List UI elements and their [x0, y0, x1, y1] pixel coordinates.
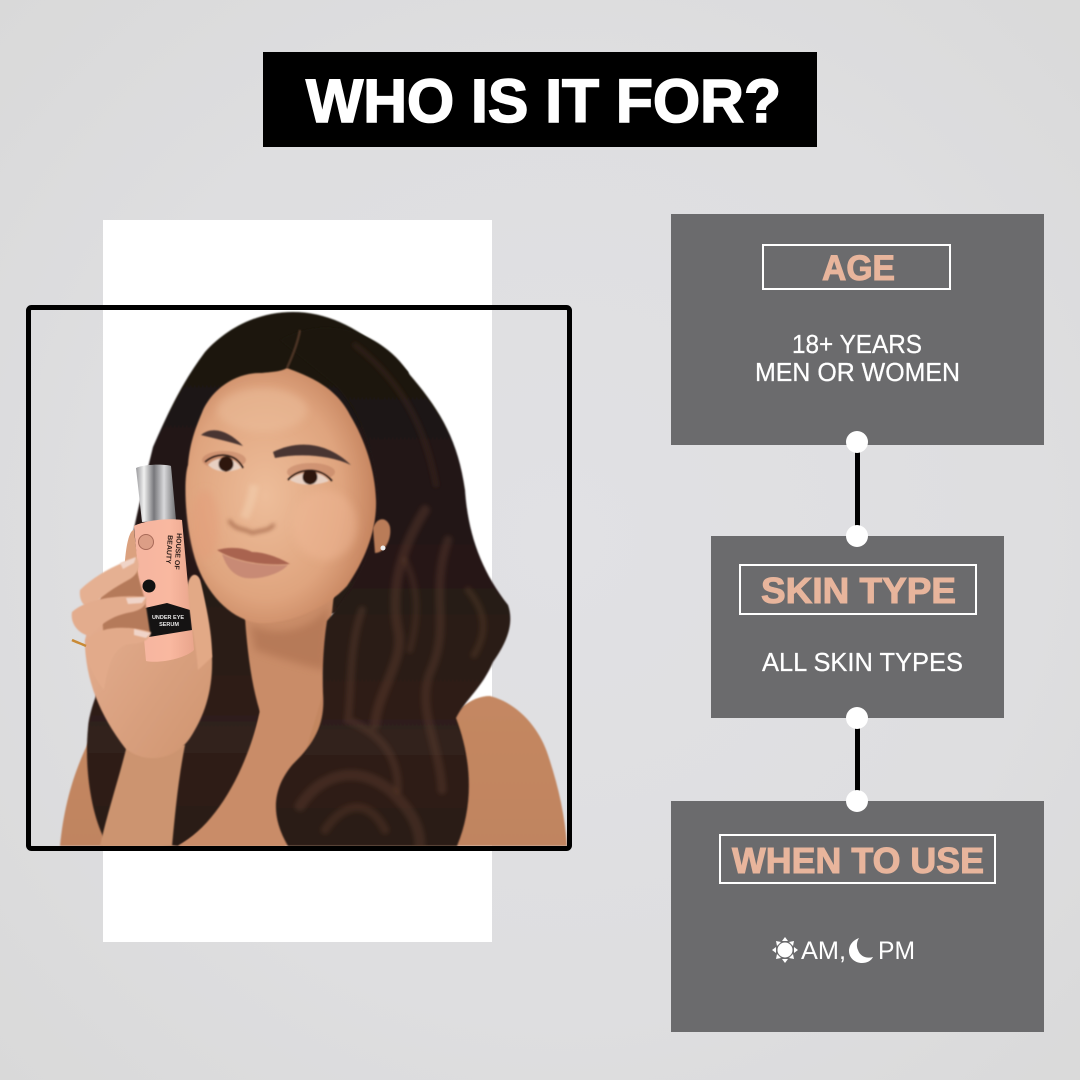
AM label: AM, — [801, 937, 846, 965]
eyebrows — [201, 430, 351, 465]
connector dots — [846, 431, 868, 812]
white backing panel — [103, 220, 492, 942]
photo: woman holding serum bottle — [60, 312, 567, 846]
bottle: SERUM — [159, 622, 179, 628]
index finger — [80, 558, 139, 608]
when to use heading: WHEN TO USE — [732, 840, 984, 881]
panel: when to use — [671, 801, 1044, 1032]
black badge — [142, 580, 156, 592]
cheek and forehead shading — [191, 388, 357, 560]
palm behind bottle — [85, 576, 212, 758]
PM label: PM — [878, 937, 915, 965]
back hair: crown and left side — [87, 312, 408, 846]
fingers — [71, 558, 152, 652]
logo circle — [138, 534, 154, 550]
photo frame — [28, 308, 570, 848]
body skin: shoulders and chest — [59, 685, 567, 846]
skin type heading: SKIN TYPE — [761, 570, 956, 611]
middle finger — [72, 596, 146, 636]
icon: sun — [772, 937, 798, 963]
age text: 18+ YEARS — [792, 331, 922, 359]
finger behind bottle — [125, 530, 139, 582]
age text — [755, 331, 960, 387]
skin type heading — [740, 565, 976, 614]
eyes — [202, 451, 335, 485]
arm — [100, 745, 185, 846]
ear and earring — [373, 519, 390, 553]
thumb over bottle — [188, 575, 212, 670]
panel: skin type — [711, 536, 1004, 718]
bottle — [134, 465, 194, 662]
neck — [178, 585, 335, 846]
black label — [145, 603, 192, 637]
age heading — [763, 245, 950, 289]
age heading: AGE — [822, 249, 895, 288]
finger gaps — [100, 572, 151, 632]
lips — [217, 548, 290, 578]
nose — [229, 485, 274, 533]
neck shadow under jaw — [252, 612, 332, 669]
title — [263, 52, 817, 147]
face — [185, 368, 376, 623]
icon: moon — [849, 938, 873, 963]
ring — [72, 640, 86, 646]
title: WHO IS IT FOR? — [306, 67, 781, 135]
brand text: HOUSE OF — [172, 533, 182, 571]
fingernails — [120, 557, 151, 638]
parting line — [287, 330, 300, 368]
connector lines — [855, 442, 860, 801]
bottle body — [134, 519, 194, 662]
bottle cap — [136, 465, 176, 522]
age text: MEN OR WOMEN — [755, 359, 960, 387]
right hair — [276, 328, 510, 846]
skin type text: ALL SKIN TYPES — [762, 649, 963, 677]
label text: UNDER EYE — [152, 615, 184, 621]
hair highlights — [300, 345, 483, 846]
panel: age — [671, 214, 1044, 445]
bottle: BEAUTY — [164, 535, 173, 564]
ring finger — [85, 627, 152, 652]
